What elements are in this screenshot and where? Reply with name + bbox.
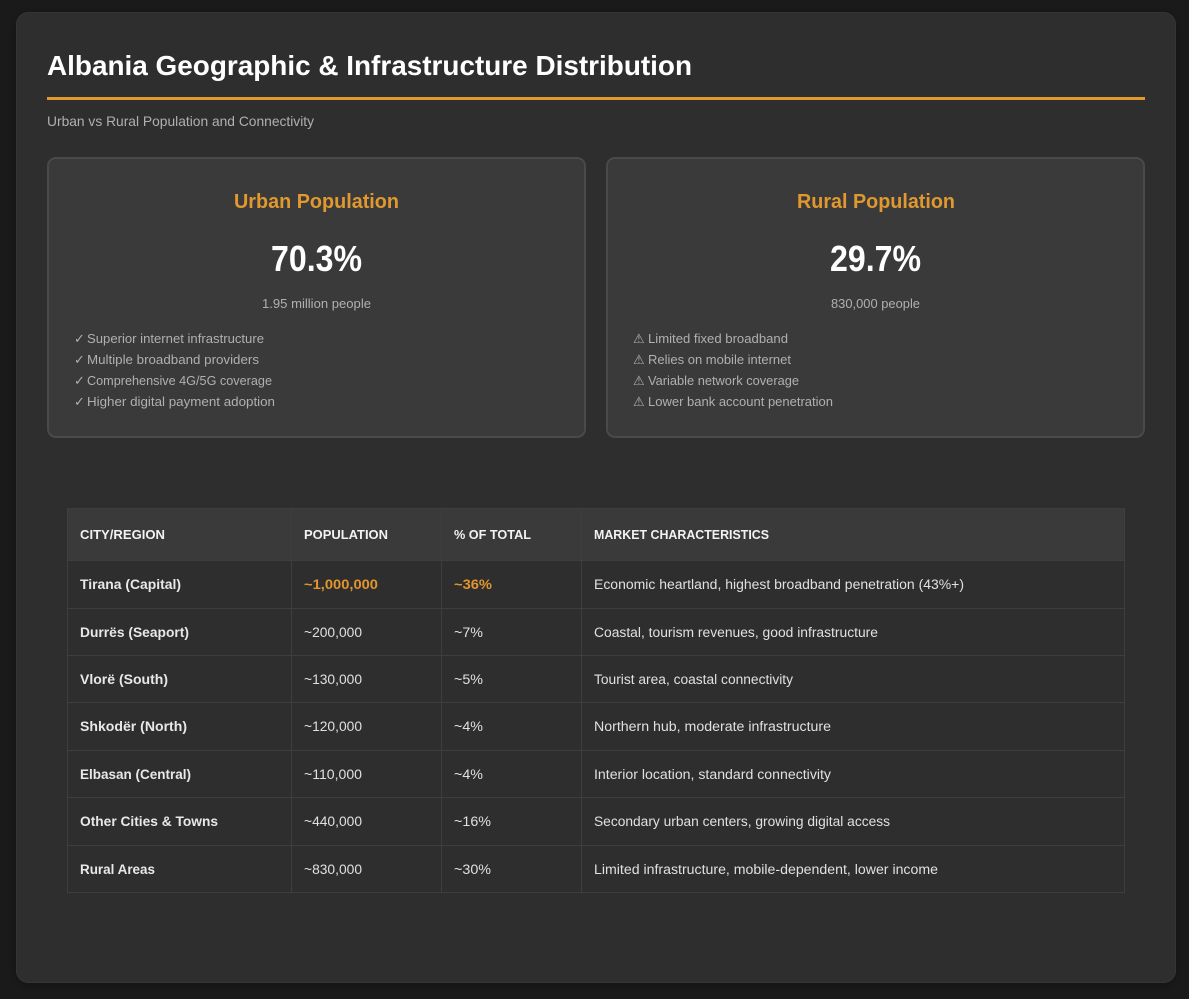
row: Shkodër <box>80 719 831 734</box>
urban people count: 1.95 million people <box>262 296 371 311</box>
row: other cities and towns: ~16% <box>454 814 491 829</box>
urban benefits list: ✓ <box>74 374 85 389</box>
row: Elbasan: ~110,000 <box>304 767 362 782</box>
table header: CITY/REGION <box>80 528 165 542</box>
row: Tirana: Economic heartland, highest broadband penetration (43%+) <box>594 577 964 592</box>
rural people count: 830,000 people <box>831 296 920 311</box>
rural limitations list: ⚠ <box>633 353 645 368</box>
row: Elbasan <box>80 767 831 782</box>
city and region table <box>68 508 1124 892</box>
row: Durrës: ~200,000 <box>304 625 362 640</box>
row: Elbasan: ~4% <box>454 767 483 782</box>
row: rural areas <box>80 862 938 877</box>
rural limitations list <box>633 331 833 410</box>
row: other cities and towns: Secondary urban centers, growing digital access <box>594 814 890 829</box>
rural limitations list: Variable network coverage <box>648 373 799 388</box>
row: other cities and towns: Other Cities & Towns <box>80 814 218 829</box>
row: Tirana: ~1,000,000 <box>304 577 378 592</box>
rural heading: Rural Population <box>797 191 955 213</box>
urban benefits list: ✓ <box>74 395 85 410</box>
row: Shkodër: Northern hub, moderate infrastructure <box>594 719 831 734</box>
row: Tirana: ~36% <box>454 577 492 592</box>
row: Vlorë <box>80 672 793 687</box>
rural limitations list: Relies on mobile internet <box>648 352 791 367</box>
urban benefits list: Higher digital payment adoption <box>87 394 275 409</box>
row: Durrës: Durrës (Seaport) <box>80 625 189 640</box>
row: rural areas: ~30% <box>454 862 491 877</box>
urban percentage: 70.3% <box>271 238 362 279</box>
row: Vlorë: Vlorë (South) <box>80 672 168 687</box>
urban heading: Urban Population <box>234 191 399 213</box>
row: other cities and towns: ~440,000 <box>304 814 362 829</box>
row: Shkodër: ~4% <box>454 719 483 734</box>
row: Durrës: ~7% <box>454 625 483 640</box>
panel: urban population <box>48 158 585 437</box>
row: Shkodër: Shkodër (North) <box>80 719 187 734</box>
row: Durrës <box>80 625 878 640</box>
row: Tirana <box>80 577 964 592</box>
panel: rural population <box>607 158 1144 437</box>
urban benefits list: Multiple broadband providers <box>87 352 260 367</box>
rural limitations list: ⚠ <box>633 374 645 389</box>
row: rural areas: ~830,000 <box>304 862 362 877</box>
table header: % OF TOTAL <box>454 528 531 542</box>
row: Vlorë: ~130,000 <box>304 672 362 687</box>
urban benefits list <box>74 331 275 410</box>
title rule <box>47 97 1145 100</box>
row: Vlorë: Tourist area, coastal connectivity <box>594 672 793 687</box>
row: Vlorë: ~5% <box>454 672 483 687</box>
rural limitations list: Limited fixed broadband <box>648 331 788 346</box>
rural percentage: 29.7% <box>830 238 921 279</box>
rural limitations list: Lower bank account penetration <box>648 394 833 409</box>
table header: MARKET CHARACTERISTICS <box>594 528 769 542</box>
row: Elbasan: Elbasan (Central) <box>80 767 191 782</box>
title: Albania Geographic & Infrastructure Distribution <box>47 50 692 81</box>
urban benefits list: Comprehensive 4G/5G coverage <box>87 373 272 388</box>
row: other cities and towns <box>80 814 890 829</box>
urban benefits list: ✓ <box>74 353 85 368</box>
subtitle: Urban vs Rural Population and Connectivity <box>47 113 314 129</box>
row: Tirana: Tirana (Capital) <box>80 577 181 592</box>
row: Shkodër: ~120,000 <box>304 719 362 734</box>
row: Durrës: Coastal, tourism revenues, good infrastructure <box>594 625 878 640</box>
row: Elbasan: Interior location, standard connectivity <box>594 767 831 782</box>
urban benefits list: Superior internet infrastructure <box>87 331 264 346</box>
table header: POPULATION <box>304 528 388 542</box>
rural limitations list: ⚠ <box>633 395 645 410</box>
row: rural areas: Limited infrastructure, mobile-dependent, lower income <box>594 862 938 877</box>
rural limitations list: ⚠ <box>633 332 645 347</box>
urban benefits list: ✓ <box>74 332 85 347</box>
table header <box>80 528 769 542</box>
row: rural areas: Rural Areas <box>80 862 155 877</box>
